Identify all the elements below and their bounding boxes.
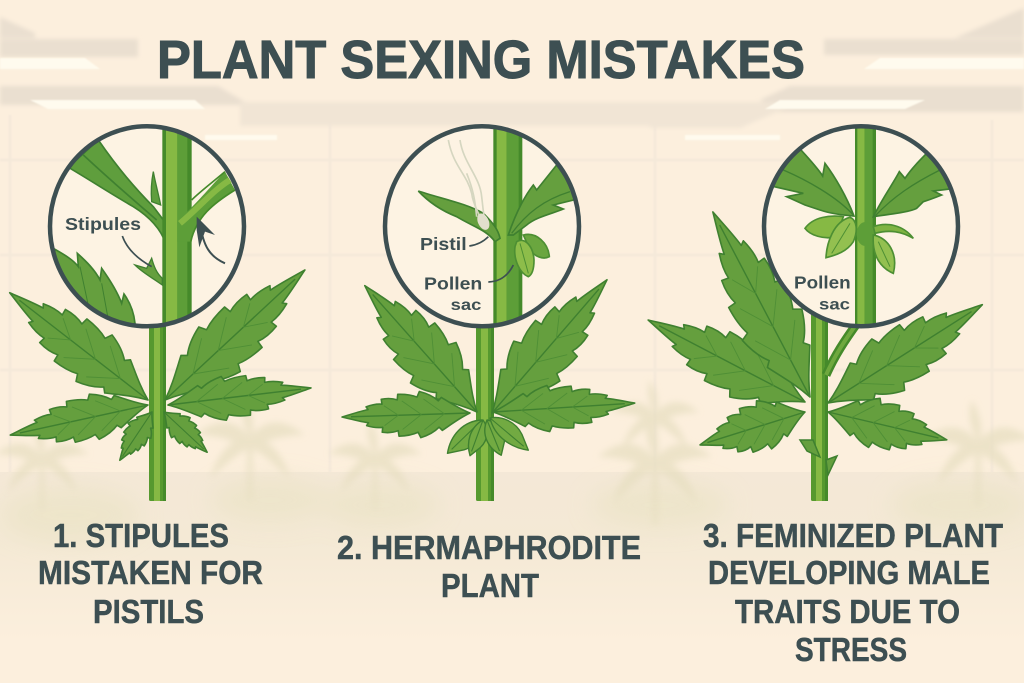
label: Stipules: Stipules	[65, 214, 141, 234]
caption 2	[337, 529, 641, 604]
plant 3: feminized with male traits	[634, 123, 999, 501]
caption 3: STRESS	[795, 631, 907, 668]
caption 2: PLANT	[441, 567, 539, 604]
plant 2 stem	[476, 300, 494, 501]
plant 1 circle ring	[50, 126, 244, 326]
caption 3	[703, 517, 1003, 668]
caption 1: MISTAKEN FOR	[38, 554, 263, 591]
plant 1 magnifier circle	[50, 126, 244, 326]
plant 1 stem	[149, 300, 166, 501]
plant 2 leaves	[341, 260, 636, 462]
label: Pollen sac: Pollen	[794, 272, 851, 292]
caption 1: 1. STIPULES	[53, 517, 229, 554]
plant 1 magnified detail	[54, 130, 236, 324]
arrow	[197, 217, 225, 263]
label: Pollen sac: sac	[819, 296, 851, 313]
plant 2 circle ring	[385, 126, 579, 326]
plant 2 magnified detail	[418, 123, 580, 327]
label: Pistil: Pistil	[420, 234, 467, 254]
plant 1 leaves	[0, 248, 326, 468]
plant 3 circle ring	[764, 126, 958, 326]
caption 3: TRAITS DUE TO	[735, 593, 960, 630]
plant 1: stipules	[0, 123, 326, 501]
plant 2: hermaphrodite	[341, 123, 636, 501]
label: Pollen sac: sac	[451, 297, 482, 314]
label: Pollen sac	[425, 276, 482, 310]
caption 1: PISTILS	[93, 593, 204, 630]
caption 3: DEVELOPING MALE	[708, 554, 990, 591]
caption 2: 2. HERMAPHRODITE	[337, 529, 641, 566]
pollen sacs	[515, 234, 549, 277]
label: Pollen sac: Pollen	[424, 273, 482, 293]
plant 3 magnifier circle	[764, 126, 958, 326]
plant 3 stem	[800, 300, 858, 501]
plant 2 magnifier circle	[385, 126, 579, 326]
pistil hairs	[448, 140, 492, 232]
caption 1	[38, 517, 263, 630]
plant 3 magnified detail	[774, 128, 949, 324]
title: PLANT SEXING MISTAKES	[157, 30, 805, 90]
label: Pollen sac	[795, 276, 850, 310]
pollen sacs	[805, 216, 913, 273]
plant 3 leaves	[634, 196, 999, 469]
